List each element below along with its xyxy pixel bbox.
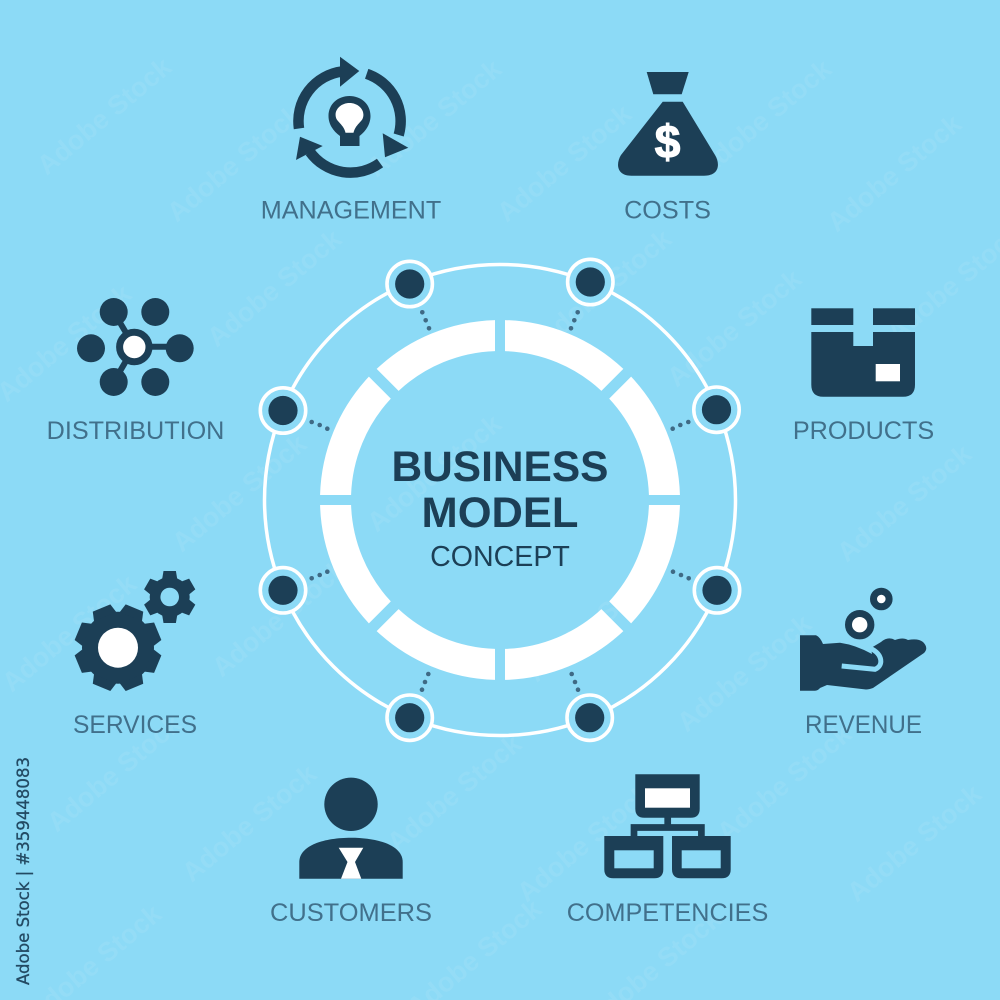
faint background watermark: Adobe Stock [491, 98, 638, 228]
faint background watermark: Adobe Stock [661, 263, 808, 393]
faint background watermark: Adobe Stock [821, 108, 968, 238]
title: BUSINESS [392, 444, 608, 491]
title: MODEL [422, 490, 578, 537]
faint background watermark: Adobe Stock [176, 758, 323, 888]
faint background watermark: Adobe Stock [201, 223, 348, 353]
title [392, 444, 608, 573]
label: distribution: DISTRIBUTION [47, 417, 224, 445]
thick segmented ring [320, 320, 680, 680]
faint background watermark: Adobe Stock [691, 53, 838, 183]
label: management: MANAGEMENT [261, 196, 441, 224]
faint background watermark: Adobe Stock [711, 718, 858, 848]
label: products: PRODUCTS [793, 417, 934, 445]
faint background watermark: Adobe Stock [166, 428, 313, 558]
faint background watermark: Adobe Stock [31, 51, 178, 181]
label: services: SERVICES [73, 711, 197, 739]
faint background watermark: Adobe Stock [361, 408, 508, 538]
icon: distribution network [77, 298, 194, 396]
icon: competencies hierarchy [604, 774, 731, 878]
faint background watermark: Adobe Stock [521, 558, 668, 688]
title: CONCEPT [430, 541, 570, 573]
faint background watermark: Adobe Stock [841, 778, 988, 908]
faint background watermark: Adobe Stock [161, 98, 308, 228]
faint background watermark: Adobe Stock [381, 728, 528, 858]
stock id side text: Adobe Stock | #359448083 [14, 757, 34, 985]
connector dots [309, 310, 691, 692]
central diagram [260, 259, 740, 740]
faint background watermark: Adobe Stock [531, 223, 678, 353]
faint background watermark: Adobe Stock [41, 708, 188, 838]
icon: management cycle with bulb [296, 57, 408, 173]
icon: product box [811, 308, 915, 397]
label: costs: COSTS [624, 196, 711, 224]
label: revenue: REVENUE [805, 711, 922, 739]
ring nodes [260, 259, 740, 740]
icon: money bag [618, 72, 718, 176]
icon: hand with coins [800, 591, 926, 691]
icon: money bag: $ [655, 116, 680, 168]
faint background watermark: Adobe Stock [361, 53, 508, 183]
faint background watermark: Adobe Stock [831, 438, 978, 568]
faint background watermark: Adobe Stock [671, 608, 818, 738]
faint background watermark: Adobe Stock [206, 553, 353, 683]
label: customers: CUSTOMERS [270, 899, 432, 927]
icon: customer person [299, 778, 403, 879]
icon: gears [74, 571, 196, 692]
faint background watermark: Adobe Stock [0, 568, 143, 698]
label: competencies: COMPETENCIES [567, 899, 768, 927]
faint background watermark: Adobe Stock [511, 778, 658, 908]
